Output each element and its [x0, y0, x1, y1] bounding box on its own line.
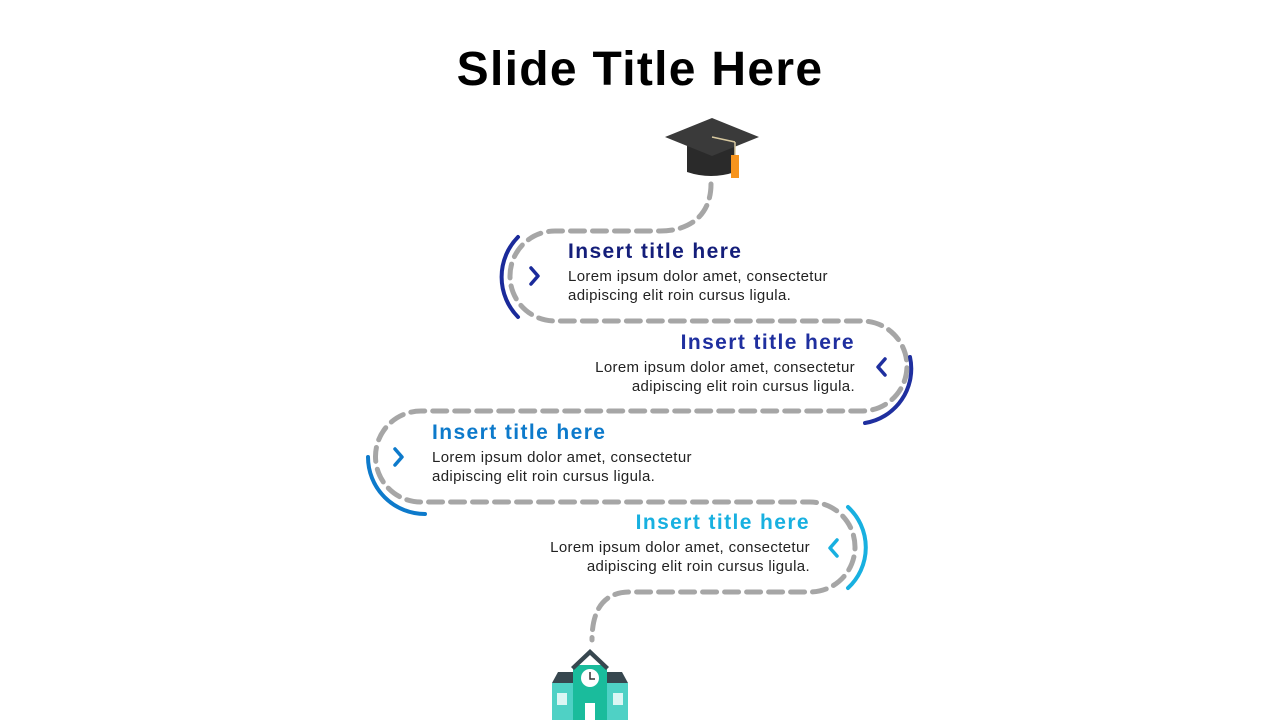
step 4: Lorem ipsum dolor amet, consectetur [550, 539, 810, 556]
step 1: Lorem ipsum dolor amet, consectetur [568, 268, 828, 285]
step 3: Lorem ipsum dolor amet, consectetur [432, 449, 692, 466]
step 2: Lorem ipsum dolor amet, consectetur [595, 359, 855, 376]
step 1 [568, 240, 828, 304]
step 1: adipiscing elit roin cursus ligula. [568, 287, 791, 304]
step 4 [550, 511, 810, 575]
step 2: adipiscing elit roin cursus ligula. [632, 378, 855, 395]
step 3 [432, 421, 692, 485]
arc 3 [368, 457, 425, 514]
step 3: Insert title here [432, 421, 606, 444]
step 4: adipiscing elit roin cursus ligula. [587, 558, 810, 575]
chevrons [395, 268, 885, 556]
arc 1 [502, 237, 518, 317]
arc 2 [865, 357, 911, 423]
arc 4 [848, 507, 866, 588]
icon: graduation cap [665, 118, 759, 178]
step 2 [595, 331, 855, 395]
step 4: Insert title here [636, 511, 810, 534]
title: Slide Title Here [457, 43, 823, 96]
step 3: adipiscing elit roin cursus ligula. [432, 468, 655, 485]
step 2: Insert title here [681, 331, 855, 354]
step 1: Insert title here [568, 240, 742, 263]
dashed road [376, 184, 907, 640]
icon: school [552, 649, 628, 720]
